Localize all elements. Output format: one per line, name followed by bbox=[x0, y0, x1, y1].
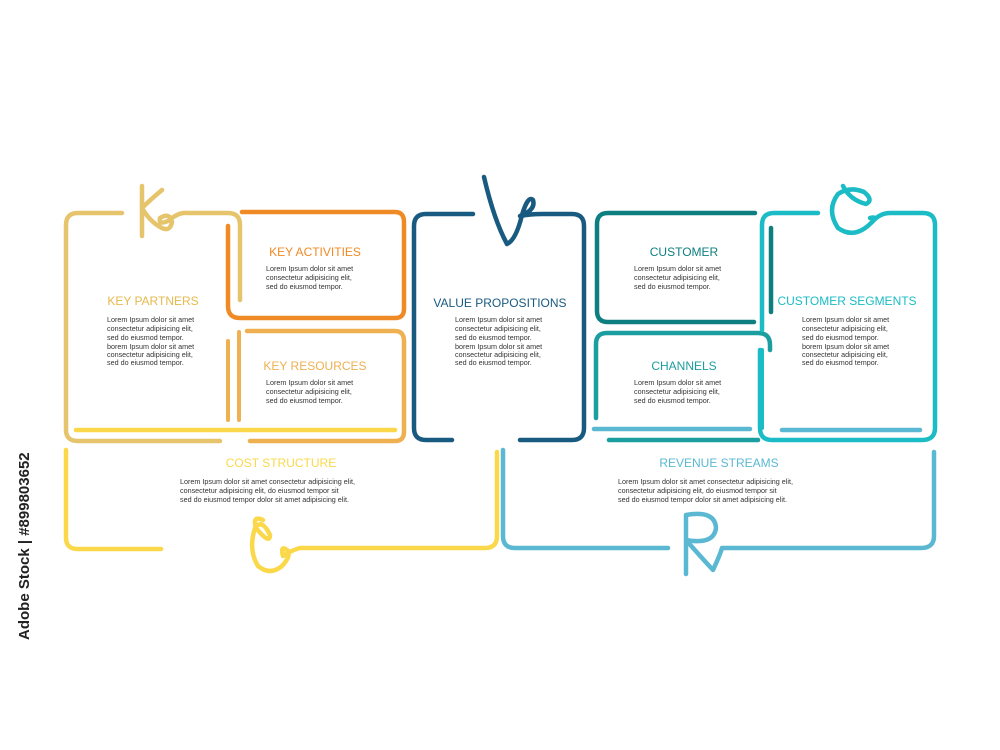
panel: value propositions: consectetur adipisicing elit, bbox=[455, 350, 541, 359]
panel: customer segments: borem Ipsum dolor sit amet bbox=[802, 342, 889, 351]
panel: customer segments: sed do eiusmod tempor. bbox=[802, 358, 879, 367]
panel: key activities bbox=[228, 212, 404, 318]
panel: key activities: Lorem Ipsum dolor sit amet bbox=[266, 264, 353, 273]
panel: key activities: consectetur adipisicing elit, bbox=[266, 273, 352, 282]
panel: revenue streams: sed do eiusmod tempor dolor sit amet adipisicing elit. bbox=[618, 495, 787, 504]
panel: value propositions: borem Ipsum dolor sit amet bbox=[455, 342, 542, 351]
panel: cost structure: Lorem Ipsum dolor sit amet consectetur adipisicing elit, bbox=[180, 477, 355, 486]
panel: key partners bbox=[66, 186, 240, 441]
panel: cost structure: consectetur adipisicing elit, do eiusmod tempor sit bbox=[180, 486, 339, 495]
panel: key resources: KEY RESOURCES bbox=[263, 359, 367, 373]
panel: customer segments: consectetur adipisicing elit, bbox=[802, 350, 888, 359]
panel: key activities: KEY ACTIVITIES bbox=[269, 245, 361, 259]
panel: channels: CHANNELS bbox=[651, 359, 717, 373]
panel: channels: Lorem Ipsum dolor sit amet bbox=[634, 378, 721, 387]
panel: key resources: sed do eiusmod tempor. bbox=[266, 396, 343, 405]
panel: channels: sed do eiusmod tempor. bbox=[634, 396, 711, 405]
icon: letter C bbox=[832, 186, 875, 233]
panel: key partners: sed do eiusmod tempor. bbox=[107, 358, 184, 367]
panel: key partners: sed do eiusmod tempor. bbox=[107, 333, 184, 342]
panel: value propositions: sed do eiusmod tempor. bbox=[455, 358, 532, 367]
panel: key resources bbox=[228, 331, 404, 441]
panel: value propositions bbox=[414, 177, 584, 440]
panel: key resources: Lorem Ipsum dolor sit amet bbox=[266, 378, 353, 387]
panel: channels: consectetur adipisicing elit, bbox=[634, 387, 720, 396]
icon: letter C cost bbox=[252, 452, 497, 571]
panel: customer: CUSTOMER bbox=[650, 245, 719, 259]
icon: letter R bbox=[686, 452, 934, 574]
panel: value propositions: VALUE PROPOSITIONS bbox=[433, 296, 567, 310]
panel: value propositions: sed do eiusmod tempor. bbox=[455, 333, 532, 342]
stock id: Adobe Stock | #899803652 bbox=[16, 452, 33, 640]
panel: key resources: consectetur adipisicing elit, bbox=[266, 387, 352, 396]
panel: revenue streams: Lorem Ipsum dolor sit amet consectetur adipisicing elit, bbox=[618, 477, 793, 486]
panel: key partners: consectetur adipisicing elit, bbox=[107, 324, 193, 333]
panel: customer segments: CUSTOMER SEGMENTS bbox=[777, 294, 917, 308]
panel: key partners: Lorem Ipsum dolor sit amet bbox=[107, 315, 194, 324]
panel: key partners: consectetur adipisicing elit, bbox=[107, 350, 193, 359]
panel: value propositions: Lorem Ipsum dolor sit amet bbox=[455, 315, 542, 324]
panel: customer segments: sed do eiusmod tempor. bbox=[802, 333, 879, 342]
panel: key activities: sed do eiusmod tempor. bbox=[266, 282, 343, 291]
panel: key partners: borem Ipsum dolor sit amet bbox=[107, 342, 194, 351]
panel: cost structure bbox=[66, 450, 497, 571]
panel: revenue streams bbox=[503, 450, 934, 574]
panel: customer segments: Lorem Ipsum dolor sit amet bbox=[802, 315, 889, 324]
panel: customer segments: consectetur adipisicing elit, bbox=[802, 324, 888, 333]
panel: customer: sed do eiusmod tempor. bbox=[634, 282, 711, 291]
panel: cost structure: COST STRUCTURE bbox=[226, 456, 336, 470]
icon: letter V bbox=[484, 177, 584, 440]
panel: key partners: KEY PARTNERS bbox=[107, 294, 199, 308]
panel: customer: Lorem Ipsum dolor sit amet bbox=[634, 264, 721, 273]
panel: revenue streams: REVENUE STREAMS bbox=[659, 456, 779, 470]
panel: channels bbox=[594, 333, 770, 440]
panel: cost structure: sed do eiusmod tempor dolor sit amet adipisicing elit. bbox=[180, 495, 349, 504]
panel: customer segments bbox=[760, 186, 935, 440]
panel: revenue streams: consectetur adipisicing elit, do eiusmod tempor sit bbox=[618, 486, 777, 495]
panel: customer: consectetur adipisicing elit, bbox=[634, 273, 720, 282]
panel: value propositions: consectetur adipisicing elit, bbox=[455, 324, 541, 333]
icon: letter K bbox=[142, 186, 240, 300]
panel: customer bbox=[597, 213, 771, 322]
